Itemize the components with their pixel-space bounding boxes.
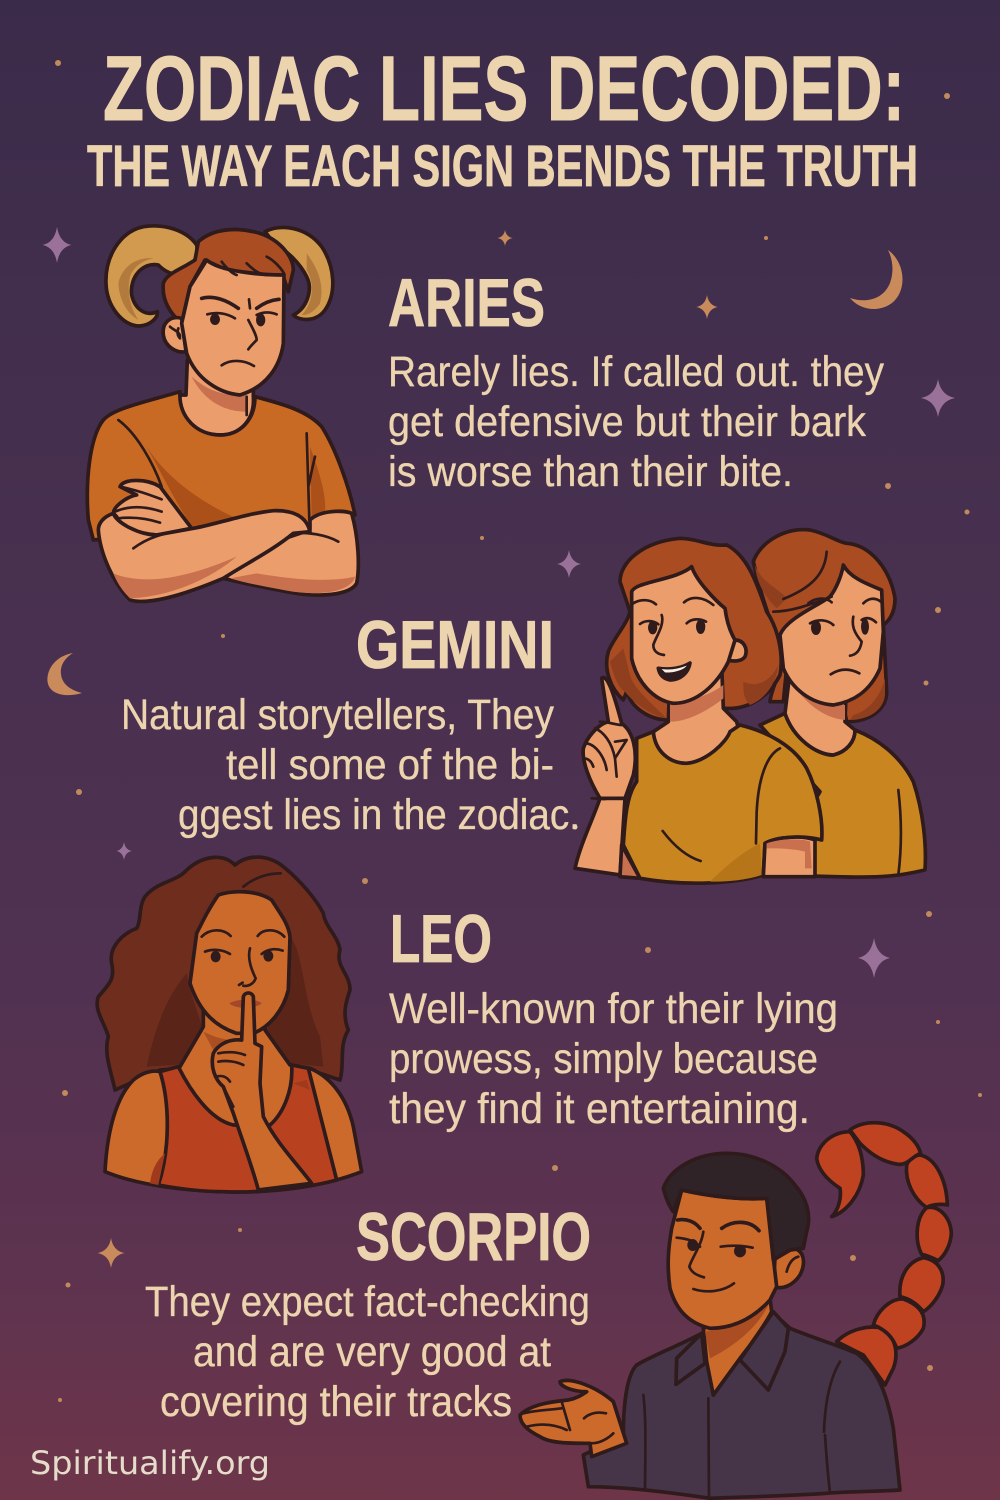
text: Gemini description: Natural storytellers, They xyxy=(121,691,554,739)
text: Leo description: prowess, simply because xyxy=(389,1035,818,1083)
illustration: Scorpio man with scorpion tail xyxy=(520,1123,951,1498)
illustration: Aries man with ram horns xyxy=(87,226,358,601)
heading: Scorpio: SCORPIO xyxy=(356,1199,591,1275)
text: Scorpio description xyxy=(145,1278,590,1426)
text: Leo description xyxy=(389,985,838,1133)
text: Gemini description: tell some of the bi- xyxy=(226,741,554,789)
watermark: Spiritualify.org xyxy=(30,1444,270,1482)
heading: Gemini: GEMINI xyxy=(356,607,554,683)
text: Aries description: is worse than their bite. xyxy=(388,448,793,496)
heading: Leo: LEO xyxy=(390,901,492,977)
heading: Aries: ARIES xyxy=(388,265,545,341)
text: Aries description: Rarely lies. If called out. they xyxy=(388,348,884,396)
text: Scorpio description: covering their tracks xyxy=(160,1378,512,1426)
text: Gemini description xyxy=(121,691,580,839)
illustration: Gemini twins xyxy=(575,530,925,883)
text: Scorpio description: They expect fact-checking xyxy=(145,1278,590,1326)
text: Leo description: they find it entertaining. xyxy=(389,1085,810,1133)
Aries face xyxy=(182,260,284,395)
text: Leo description: Well-known for their lying xyxy=(389,985,838,1033)
text: Aries description xyxy=(388,348,884,496)
text: Aries description: get defensive but their bark xyxy=(388,398,866,446)
text: Scorpio description: and are very good at xyxy=(193,1328,551,1376)
illustration: Leo woman with finger on lips xyxy=(97,857,362,1192)
text: Gemini description: ggest lies in the zodiac. xyxy=(178,791,580,839)
